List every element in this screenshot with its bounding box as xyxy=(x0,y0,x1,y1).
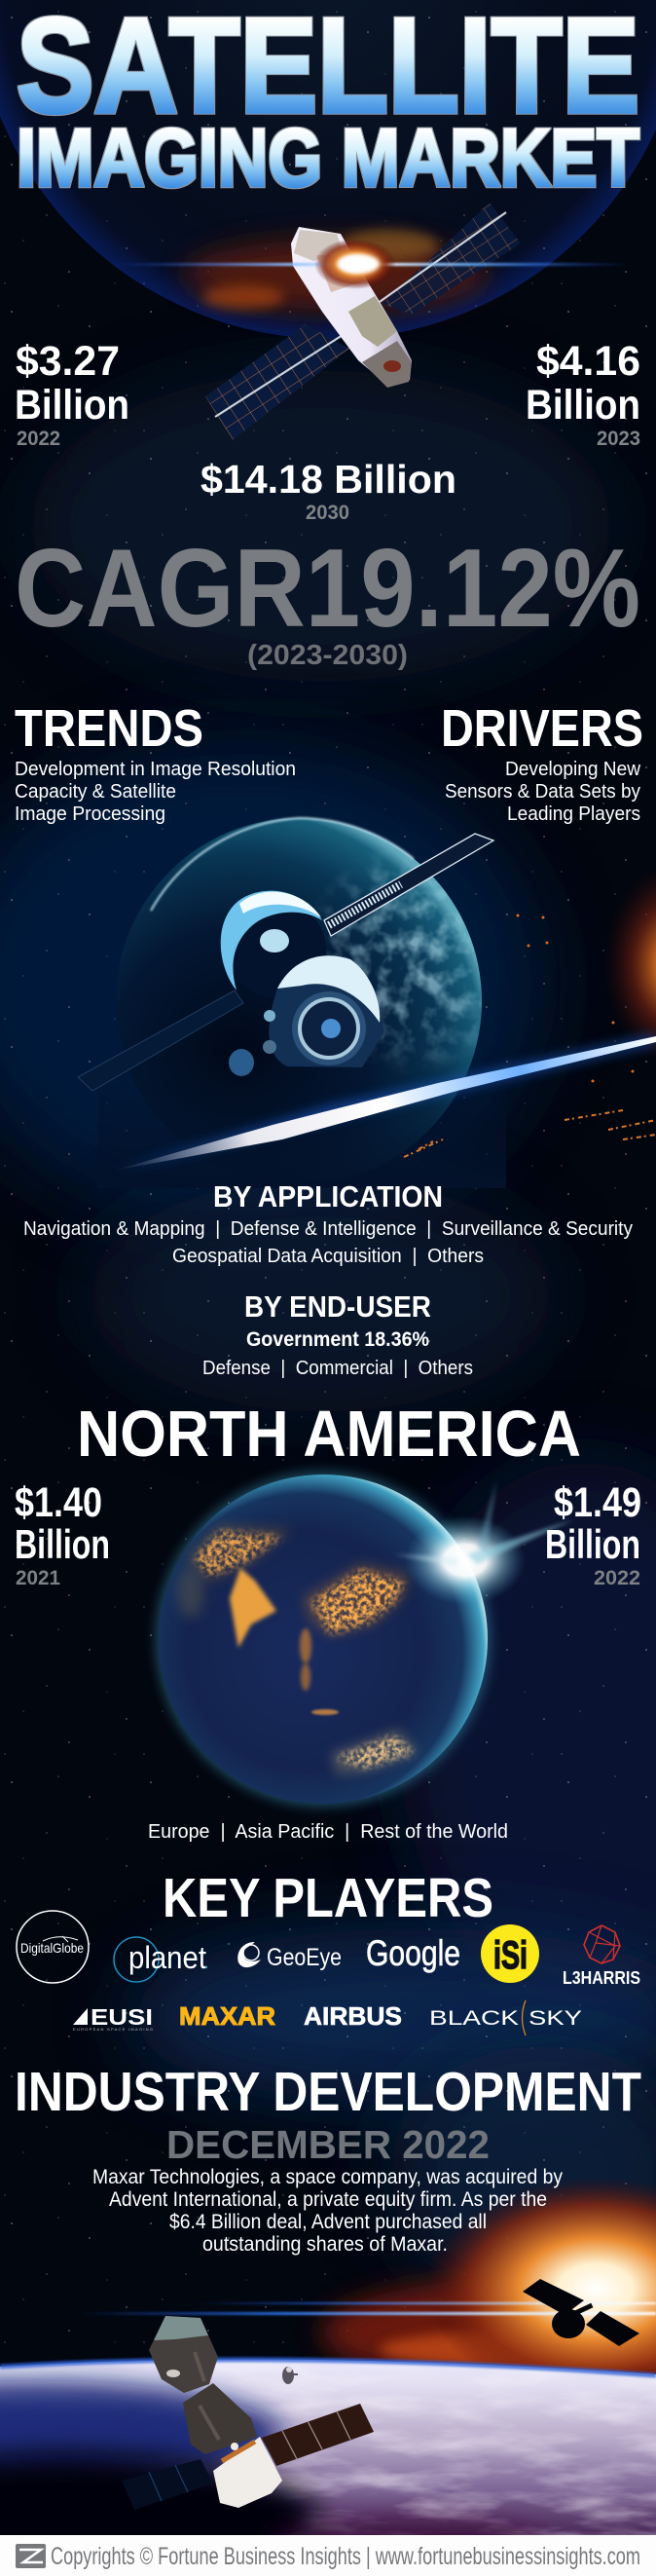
blue light streak xyxy=(113,1034,656,1171)
by end-user: BY END-USER xyxy=(244,1289,431,1324)
value 2022: 2022 xyxy=(17,428,60,450)
icon: logo xyxy=(16,2544,46,2568)
value 2023: 2023 xyxy=(597,428,640,450)
icon: astronaut xyxy=(282,2367,298,2384)
value 2023: $4.16 xyxy=(536,338,640,385)
value 2022 xyxy=(15,338,129,450)
sun glow scene xyxy=(78,2177,656,2401)
trends text: Image Processing xyxy=(15,803,165,825)
drivers text: Sensors & Data Sets by xyxy=(445,781,640,803)
logo: Airbus: AIRBUS xyxy=(304,2001,402,2031)
globe xyxy=(156,1472,574,1807)
description: $6.4 Billion deal, Advent purchased all xyxy=(169,2211,487,2233)
docking ring xyxy=(292,991,366,1065)
description: outstanding shares of Maxar. xyxy=(202,2233,448,2256)
drivers text: Leading Players xyxy=(507,803,640,825)
value 2023 xyxy=(526,338,640,450)
by end-user: Defense | Commercial | Others xyxy=(202,1358,473,1379)
value 2022: 2022 xyxy=(594,1567,640,1589)
by application: Geospatial Data Acquisition | Others xyxy=(172,1246,484,1267)
sun flare on globe xyxy=(394,1480,574,1605)
trends text: Capacity & Satellite xyxy=(15,781,176,803)
spacecraft: soyuz xyxy=(122,2316,374,2510)
panel: north america xyxy=(15,1398,641,1843)
logo: L3Harris xyxy=(563,1925,640,1988)
icon: silhouette satellite xyxy=(523,2279,639,2346)
logo: Maxar: MAXAR xyxy=(179,2001,275,2031)
by end-user: Government 18.36% xyxy=(246,1328,429,1351)
dome crescent xyxy=(221,891,322,990)
description xyxy=(92,2166,563,2256)
logo: BlackSky xyxy=(429,2000,582,2035)
logo: iSi: iSi xyxy=(493,1934,528,1977)
title xyxy=(17,0,639,204)
nebula glow xyxy=(185,230,487,310)
trends text: Development in Image Resolution xyxy=(15,759,296,780)
by end-user xyxy=(202,1289,473,1379)
logo: L3Harris: L3HARRIS xyxy=(563,1968,640,1988)
logo: DigitalGlobe: DigitalGlobe xyxy=(20,1940,84,1956)
value 2022: $3.27 xyxy=(16,338,120,385)
panel: trends and drivers xyxy=(15,699,656,1188)
satellite xyxy=(205,203,521,440)
value 2021: $1.40 xyxy=(15,1479,102,1526)
left solar panel xyxy=(122,2459,213,2510)
orange nebula right xyxy=(603,862,656,1066)
by application xyxy=(23,1179,633,1267)
trends text xyxy=(15,759,296,825)
spacecraft xyxy=(221,891,384,1076)
solar array lower xyxy=(78,990,243,1091)
lens flare xyxy=(113,239,629,289)
logo: BlackSky: BLACK xyxy=(429,2007,519,2030)
orbital module xyxy=(149,2316,218,2393)
value 2022: $1.49 xyxy=(554,1479,641,1526)
drivers text xyxy=(445,759,641,825)
by application: Navigation & Mapping | Defense & Intelligence | Surveillance & Security xyxy=(23,1218,633,1240)
logo: DigitalGlobe xyxy=(17,1911,89,1983)
date: DECEMBER 2022 xyxy=(166,2122,490,2167)
value 2023: Billion xyxy=(526,382,640,429)
value 2022: Billion xyxy=(15,382,129,429)
value 2021 xyxy=(15,1479,110,1589)
value 2021: Billion xyxy=(15,1521,110,1567)
solar panel lower left xyxy=(205,324,349,440)
heading trends: TRENDS xyxy=(15,699,203,758)
drivers text: Developing New xyxy=(505,759,641,780)
value 2021: 2021 xyxy=(16,1567,60,1589)
city lights xyxy=(177,1524,419,1774)
value 2030 xyxy=(200,457,456,524)
service module xyxy=(213,2437,282,2508)
solar panel upper right xyxy=(383,203,521,315)
panel: key players xyxy=(17,1867,640,2035)
station body xyxy=(291,227,412,387)
logo: EUSI: EUSI xyxy=(91,2004,153,2030)
descent module xyxy=(183,2383,257,2454)
heading: KEY PLAYERS xyxy=(163,1867,493,1929)
logo: EUSI: EUROPEAN SPACE IMAGING xyxy=(73,2027,153,2032)
earth xyxy=(0,2355,656,2535)
logo: GeoEye: GeoEye xyxy=(267,1944,342,1971)
logo: EUSI xyxy=(73,2004,153,2032)
description: Maxar Technologies, a space company, was acquired by xyxy=(92,2166,563,2188)
value 2030: $14.18 Billion xyxy=(200,457,456,502)
logo: BlackSky: SKY xyxy=(528,2007,582,2030)
right solar panel xyxy=(262,2404,374,2466)
other regions: Europe | Asia Pacific | Rest of the World xyxy=(148,1821,508,1843)
solar array upper xyxy=(324,834,493,936)
logo: Google: Google xyxy=(366,1933,460,1973)
by application: BY APPLICATION xyxy=(213,1179,443,1213)
panel: footer xyxy=(0,2535,656,2576)
logo: iSi xyxy=(481,1924,539,1983)
value 2022 xyxy=(545,1479,641,1589)
logo: planet xyxy=(114,1937,207,1982)
planet behind title xyxy=(0,0,656,339)
embers xyxy=(404,914,656,1157)
value 2030: 2030 xyxy=(306,502,349,524)
description: Advent International, a private equity firm. As per the xyxy=(109,2188,547,2211)
panel: industry development xyxy=(0,2072,656,2535)
planet xyxy=(97,818,506,1188)
panel: segments xyxy=(23,1179,633,1379)
heading: NORTH AMERICA xyxy=(77,1398,581,1471)
CAGR: (2023-2030) xyxy=(247,640,408,671)
logo: planet: planet xyxy=(128,1940,206,1975)
logo: GeoEye xyxy=(237,1942,342,1971)
